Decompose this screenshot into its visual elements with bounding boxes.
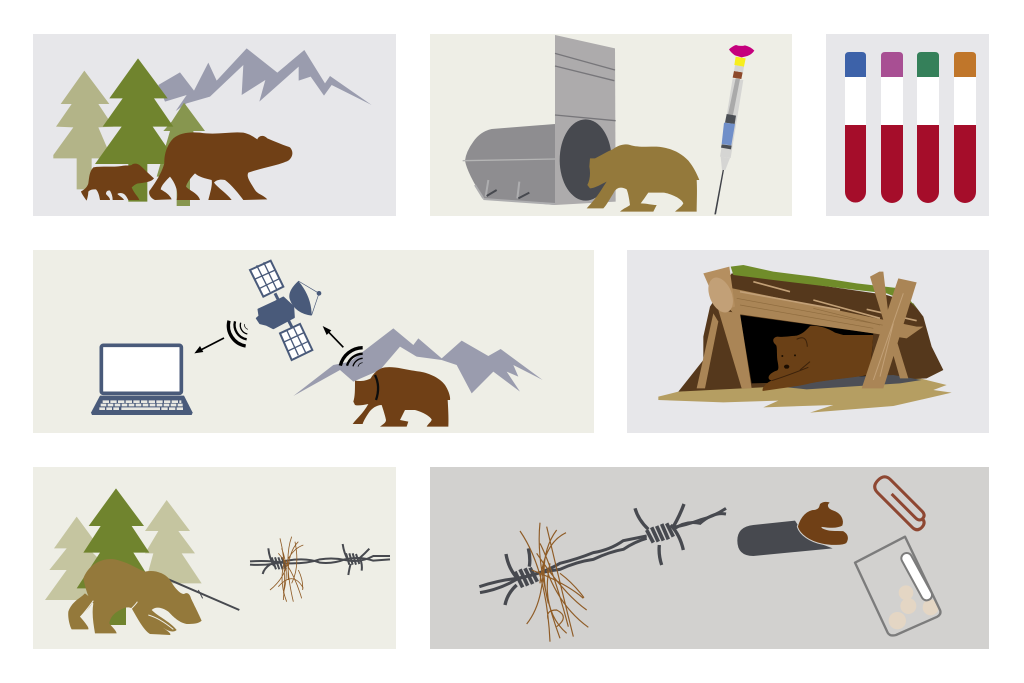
- tree: medium: [157, 103, 205, 206]
- panel: hair snag on bear: [33, 467, 396, 649]
- sample bag: [855, 537, 940, 635]
- panel: blood tubes: [826, 34, 989, 216]
- log: main beam: [708, 282, 923, 338]
- bear: adult: [149, 132, 292, 200]
- hair tuft: [520, 523, 588, 642]
- mountains: [293, 328, 543, 396]
- grass: [731, 265, 918, 310]
- barbed wire: [479, 504, 726, 605]
- panel: satellite tracking: [33, 250, 594, 433]
- log: left support: [718, 310, 752, 388]
- trap drum: [463, 124, 555, 205]
- panel: bears in habitat: [33, 34, 396, 216]
- den floor: [780, 375, 922, 389]
- panel: trap and syringe: [430, 34, 792, 216]
- log: beam end: [703, 267, 738, 316]
- sticks: right crossing: [870, 272, 908, 378]
- collar: [375, 375, 378, 400]
- bear: with collar: [353, 367, 450, 427]
- bear: resting: [763, 326, 873, 391]
- solar panel: top: [250, 261, 283, 297]
- tree: right light: [145, 500, 202, 583]
- tree: dark: [77, 488, 157, 625]
- signal: satellite to laptop: [228, 321, 248, 346]
- bear: rubbing: [68, 559, 202, 635]
- scat: [797, 501, 848, 545]
- barbed wire strand: [168, 579, 239, 610]
- sample tube: [737, 521, 833, 556]
- laptop: [91, 345, 193, 415]
- panel: hair and scat samples: [430, 467, 989, 649]
- earth mound: [678, 273, 943, 392]
- keyboard: [99, 402, 184, 409]
- tree: light: [53, 71, 113, 189]
- tree: dark: [95, 58, 178, 202]
- mountains: [158, 48, 372, 111]
- log: thin left brace: [697, 313, 718, 388]
- solar panel: bottom: [280, 324, 312, 360]
- den opening: [740, 315, 873, 383]
- panel: bear in den: [627, 250, 989, 433]
- bear: entering trap: [587, 144, 699, 212]
- tube: purple: [881, 52, 903, 203]
- paperclip: [872, 474, 930, 532]
- ground: [658, 378, 952, 413]
- body: [257, 297, 294, 328]
- tube: green: [917, 52, 939, 203]
- syringe: [714, 45, 754, 214]
- arrow: satellite to laptop: [194, 338, 224, 353]
- dish: [289, 281, 312, 316]
- log: right post: [862, 278, 917, 388]
- signal: from collar: [340, 348, 363, 367]
- arrow: collar to satellite: [323, 326, 343, 347]
- tube: blue: [845, 52, 866, 203]
- hair tuft: [270, 537, 303, 602]
- tree: left light: [45, 517, 117, 600]
- satellite: [250, 261, 321, 360]
- barbed wire with hair: [250, 537, 390, 602]
- trap door tower: [555, 35, 616, 205]
- tube: orange: [954, 52, 976, 203]
- bear: cub: [81, 164, 154, 201]
